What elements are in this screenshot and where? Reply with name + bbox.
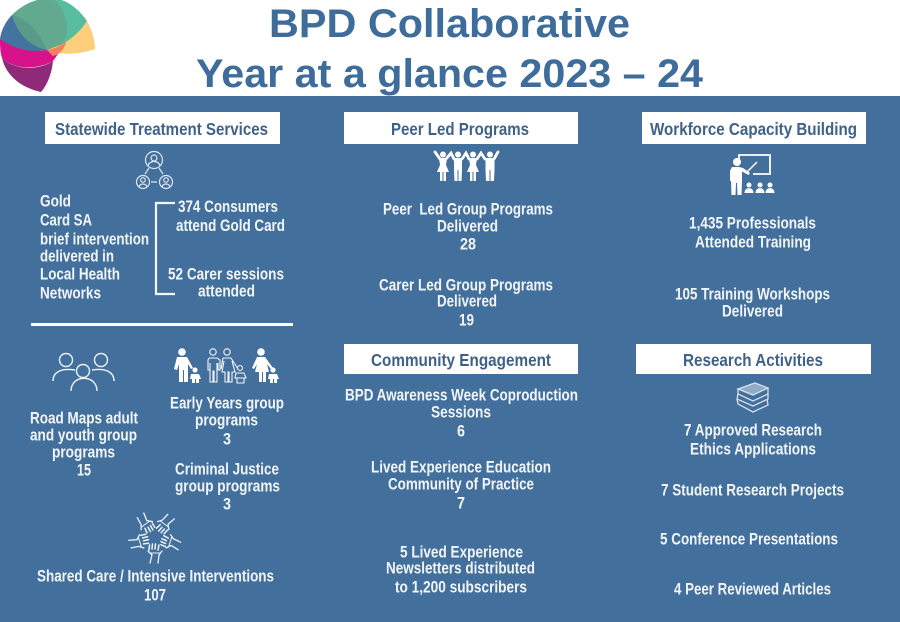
stat: carer led group programs <box>379 277 553 330</box>
stat: student research projects: 7 Student Research Projects <box>661 482 844 500</box>
stat: carer led group programs: Carer Led Group Programs <box>379 277 553 295</box>
stat: road maps: and youth group <box>30 427 137 445</box>
stat: peer led group programs: Delivered <box>437 218 498 236</box>
heading: peer led programs: Peer Led Programs <box>391 119 529 139</box>
heading: community engagement: Community Engagement <box>371 350 551 370</box>
stat: professionals trained <box>689 215 816 252</box>
logo <box>0 0 95 92</box>
stat: newsletters: Newsletters distributed <box>386 560 535 578</box>
title <box>196 2 704 96</box>
stat: professionals trained: 1,435 Professionals <box>689 215 816 233</box>
stat: road maps: Road Maps adult <box>30 410 138 428</box>
text: gold card sa: Card SA <box>40 212 92 230</box>
stat: ethics applications <box>684 422 822 459</box>
panel: research activities <box>636 344 871 599</box>
stat: newsletters: to 1,200 subscribers <box>395 579 527 597</box>
stat: community of practice: Lived Experience Education <box>371 459 551 477</box>
heading: workforce capacity building: Workforce Capacity Building <box>650 119 857 139</box>
stat: carer sessions: attended <box>198 283 255 301</box>
stat: criminal justice: Criminal Justice <box>175 461 279 479</box>
stat: peer led group programs: Peer Led Group Programs <box>383 201 553 219</box>
heading: workforce capacity building <box>642 112 866 144</box>
stat: early years: programs <box>195 412 258 430</box>
stat: carer sessions: 52 Carer sessions <box>168 266 284 284</box>
icon: stack of books <box>737 383 768 412</box>
text: gold card sa: Networks <box>40 285 101 303</box>
heading: community engagement <box>344 344 578 374</box>
stat: newsletters: 5 Lived Experience <box>400 544 523 562</box>
title: BPD Collaborative <box>269 2 630 46</box>
stat: training workshops <box>675 286 830 321</box>
stat: carer led group programs: Delivered <box>437 293 497 311</box>
stat: gold card consumers <box>176 198 285 235</box>
stat: coproduction sessions: Sessions <box>431 404 491 422</box>
icon: families <box>174 348 279 383</box>
stat: community of practice: Community of Practice <box>388 476 534 494</box>
icon: trainer at board <box>730 155 774 195</box>
stat: early years: 3 <box>223 431 231 449</box>
panel: community engagement <box>344 344 578 597</box>
stat: road maps <box>30 410 138 480</box>
stat: shared care: Shared Care / Intensive Interventions <box>37 568 274 586</box>
stat: early years <box>170 395 284 449</box>
stat: road maps: programs <box>52 444 115 462</box>
text: gold card sa: brief intervention <box>40 231 149 249</box>
stat: peer led group programs: 28 <box>460 236 476 254</box>
heading: research activities <box>636 344 871 374</box>
bracket <box>156 203 175 294</box>
stat: peer led group programs <box>383 201 553 254</box>
panel: statewide treatment services <box>30 112 293 605</box>
panel: peer led programs <box>344 112 578 330</box>
stat: coproduction sessions <box>345 387 578 441</box>
panel: workforce capacity building <box>642 112 866 321</box>
text: gold card sa <box>40 193 149 303</box>
title: Year at a glance 2023 – 24 <box>196 52 704 96</box>
stat: gold card consumers: attend Gold Card <box>176 217 285 235</box>
heading: statewide treatment services: Statewide Treatment Services <box>55 119 268 139</box>
heading: research activities: Research Activities <box>683 350 823 370</box>
stat: ethics applications: Ethics Applications <box>690 441 816 459</box>
stat: training workshops: 105 Training Workshops <box>675 286 830 304</box>
stat: shared care: 107 <box>144 587 166 605</box>
stat: shared care <box>37 568 274 605</box>
stat: gold card consumers: 374 Consumers <box>178 198 278 216</box>
stat: newsletters <box>386 544 535 597</box>
icon: three people <box>53 354 114 391</box>
stat: carer sessions <box>168 266 284 301</box>
stat: conference presentations: 5 Conference Presentations <box>660 531 838 549</box>
text: gold card sa: Gold <box>40 193 71 211</box>
text: gold card sa: delivered in <box>40 248 114 266</box>
stat: community of practice: 7 <box>457 495 465 513</box>
stat: professionals trained: Attended Training <box>695 234 811 252</box>
stat: criminal justice: group programs <box>175 478 280 496</box>
icon: connected people <box>136 152 172 188</box>
stat: ethics applications: 7 Approved Research <box>684 422 822 440</box>
heading: peer led programs <box>344 112 578 144</box>
stat: road maps: 15 <box>77 462 91 480</box>
text: gold card sa: Local Health <box>40 266 120 284</box>
stat: training workshops: Delivered <box>722 303 783 321</box>
icon: joined hands <box>128 512 182 563</box>
stat: early years: Early Years group <box>170 395 284 413</box>
stat: criminal justice: 3 <box>223 496 231 514</box>
heading: statewide treatment services <box>45 112 280 144</box>
stat: criminal justice <box>175 461 280 514</box>
stat: coproduction sessions: BPD Awareness Week Coproduction <box>345 387 578 405</box>
stat: peer reviewed articles: 4 Peer Reviewed Articles <box>674 581 831 599</box>
stat: coproduction sessions: 6 <box>457 423 465 441</box>
stat: community of practice <box>371 459 551 513</box>
stat: carer led group programs: 19 <box>459 312 474 330</box>
icon: four people raising arms <box>435 152 498 181</box>
